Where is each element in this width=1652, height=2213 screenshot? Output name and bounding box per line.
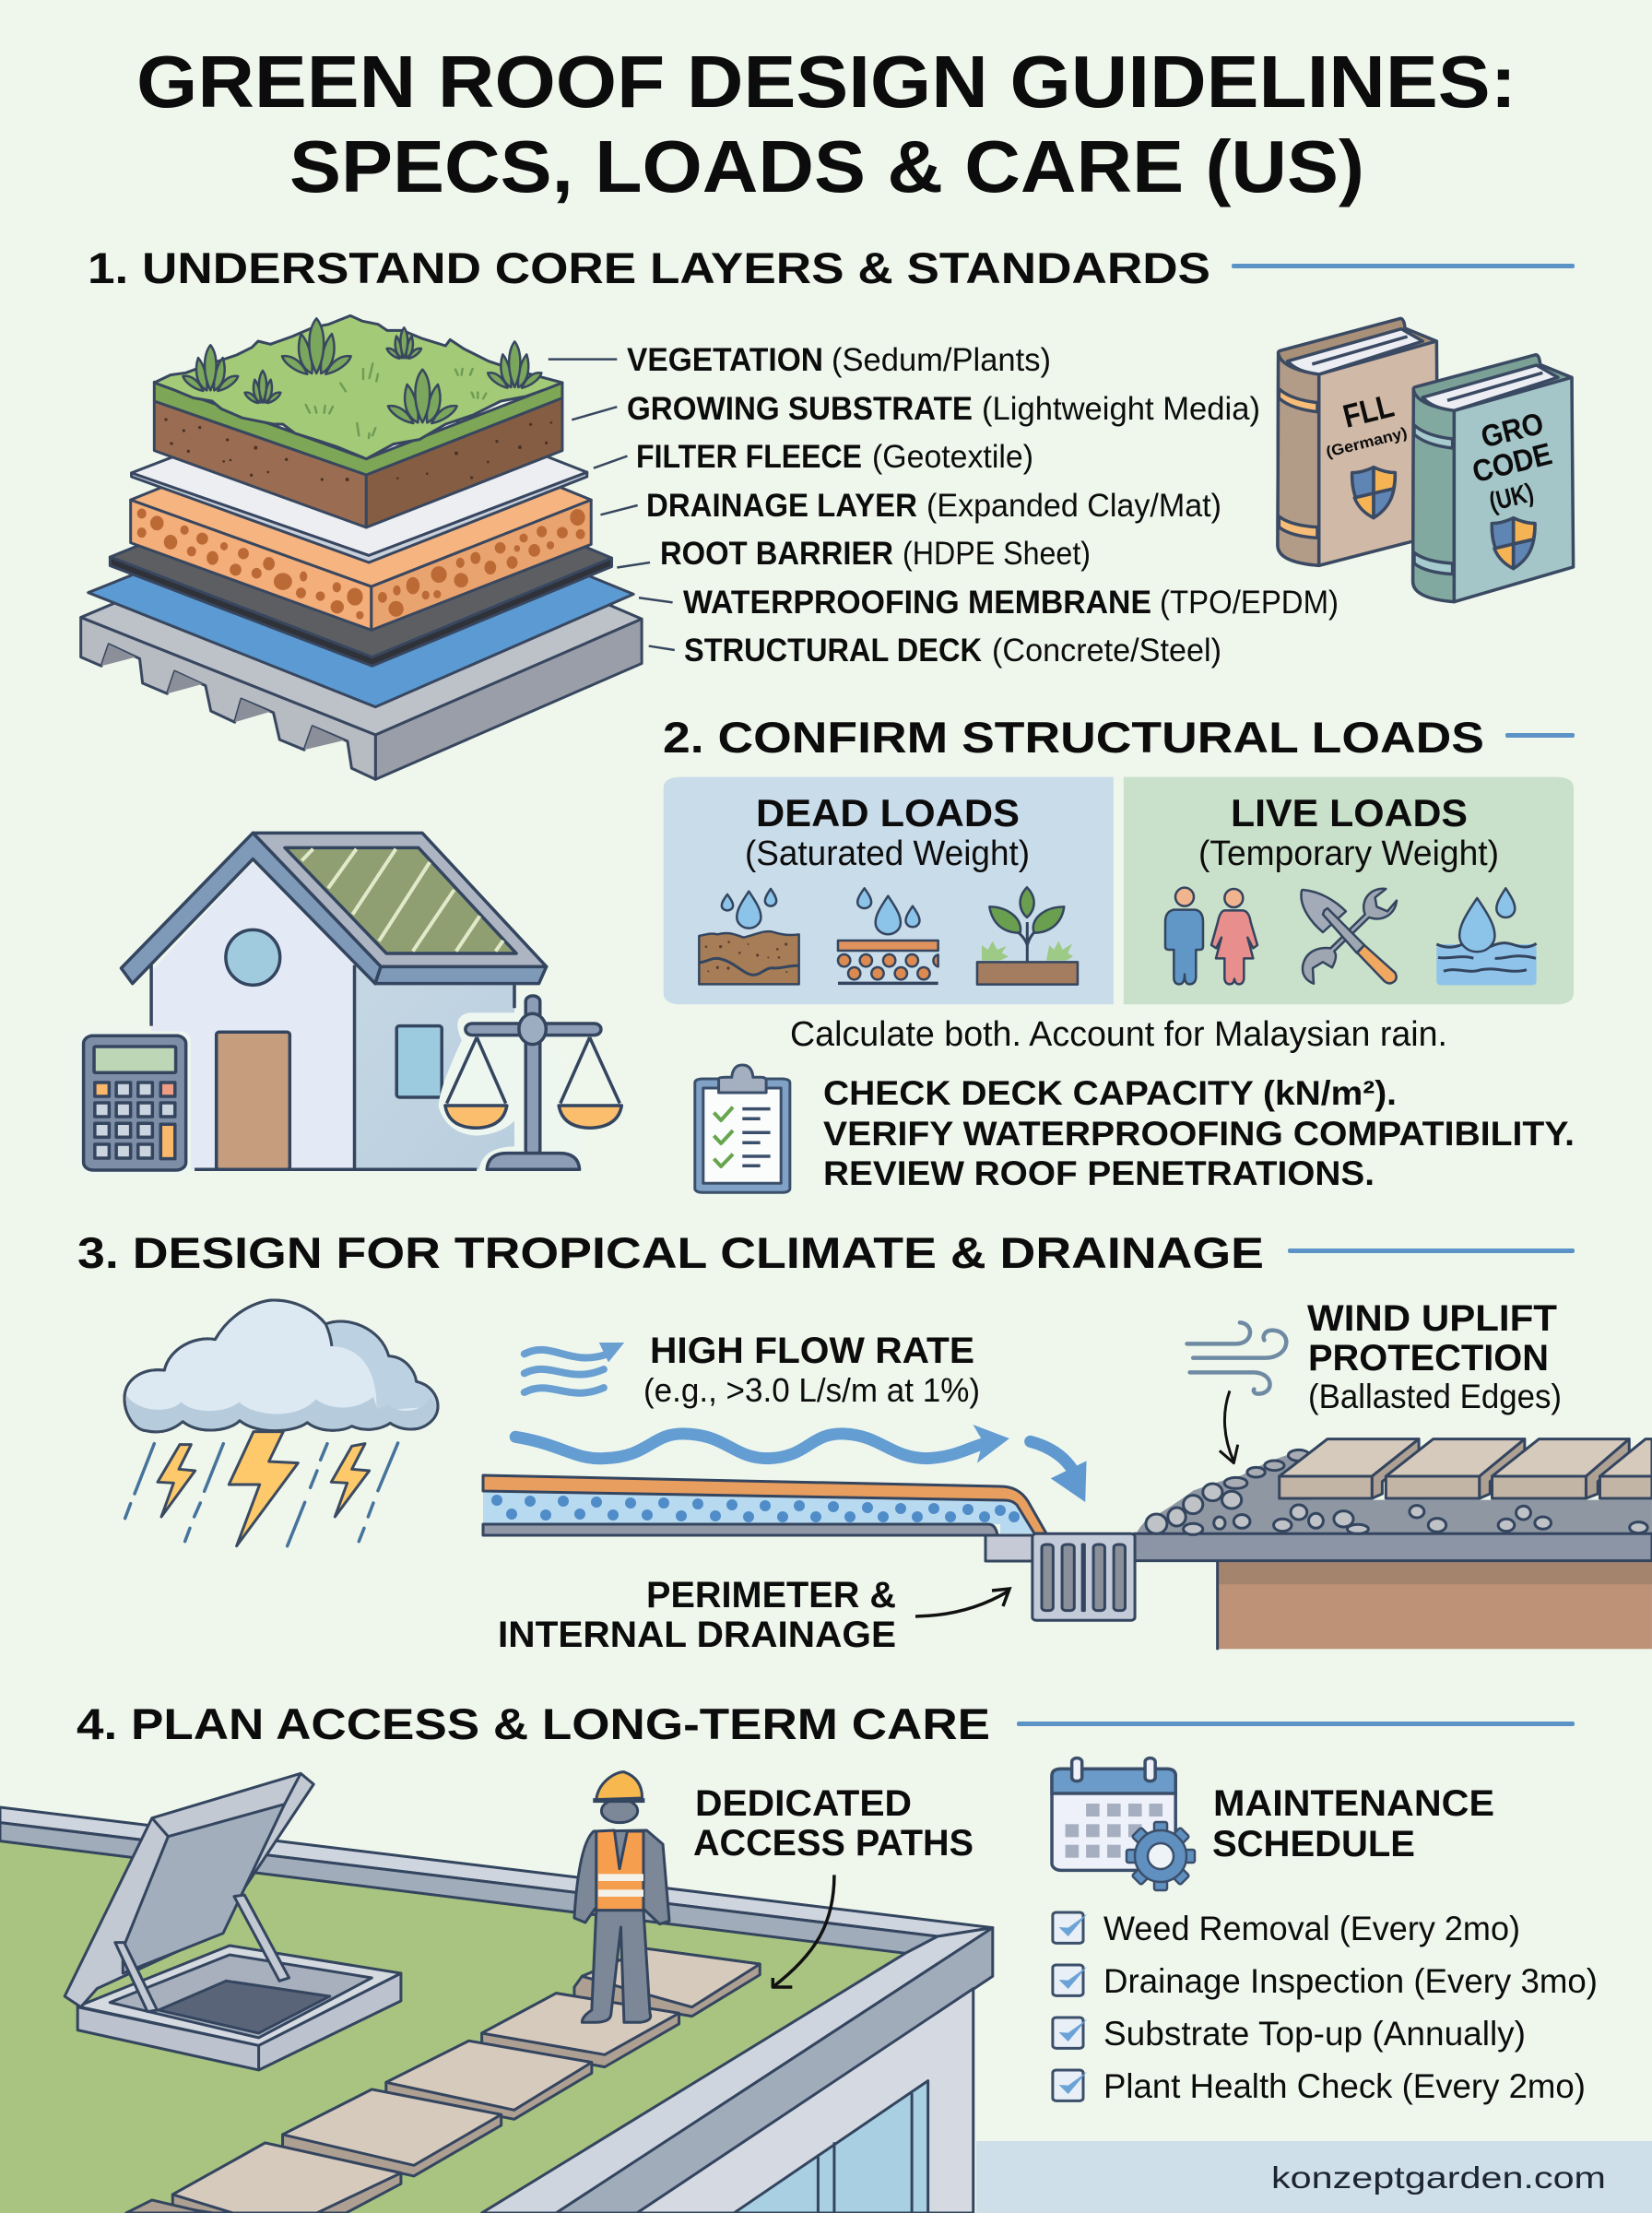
label: growing substrate: (Lightweight Media) — [982, 391, 1260, 427]
label: high flow rate: HIGH FLOW RATE — [650, 1331, 974, 1371]
layer: structural deck — [81, 498, 642, 779]
icon: plant in substrate — [977, 887, 1078, 985]
book: FLL Germany: (Germany) — [1324, 424, 1409, 461]
arrow: water into drain — [1031, 1441, 1087, 1502]
layer: drainage — [131, 407, 591, 630]
label: wind uplift protection — [1307, 1298, 1562, 1415]
building wall and window — [637, 1989, 974, 2213]
roof with green panel — [121, 833, 547, 984]
label: structural deck: (Concrete/Steel) — [992, 633, 1221, 669]
rain — [125, 1443, 398, 1546]
arrow: water flow — [515, 1425, 1009, 1463]
roof slab — [1134, 1533, 1652, 1561]
footer url: konzeptgarden.com — [1271, 2160, 1606, 2195]
gutter step — [985, 1535, 1034, 1561]
label: root barrier: (HDPE Sheet) — [903, 536, 1091, 572]
door — [217, 1032, 289, 1169]
heading: live loads: LIVE LOADS — [1231, 791, 1468, 834]
label: drainage layer: (Expanded Clay/Mat) — [926, 488, 1221, 524]
note: calculate both: Calculate both. Account for Malaysian rain. — [790, 1015, 1447, 1054]
illustration: rooftop access — [0, 1772, 993, 2213]
heading: maintenance schedule — [1212, 1783, 1494, 1864]
panel: live loads — [1124, 777, 1574, 1004]
drain substrate — [483, 1475, 1046, 1535]
label: drainage layer: DRAINAGE LAYER — [646, 488, 917, 524]
aggregate dots — [491, 1495, 1020, 1522]
cloud — [124, 1300, 438, 1432]
footer band — [976, 2141, 1652, 2213]
label: dedicated access paths: DEDICATED — [695, 1783, 912, 1824]
heading: section 1: 1. UNDERSTAND CORE LAYERS & STANDARDS — [88, 243, 1210, 292]
layer: filter fleece — [132, 384, 587, 562]
checklist text: CHECK DECK CAPACITY (kN/m²). — [823, 1074, 1397, 1112]
house walls — [151, 862, 514, 1169]
label: wind uplift protection: PROTECTION — [1308, 1338, 1549, 1379]
icon: standards books — [1278, 318, 1574, 602]
heading: maintenance schedule: MAINTENANCE — [1213, 1783, 1494, 1824]
gravel bed — [1136, 1454, 1652, 1533]
book: FLL Germany — [1278, 318, 1438, 565]
label: perimeter and internal drainage: PERIMETER & — [646, 1575, 896, 1615]
heading: section 2: 2. CONFIRM STRUCTURAL LOADS — [663, 713, 1484, 762]
label: filter fleece: FILTER FLEECE — [636, 439, 862, 475]
leader lines — [549, 360, 675, 650]
book: GRO Code UK — [1413, 355, 1574, 602]
panel: dead loads — [664, 777, 1114, 1004]
icon: gear — [1127, 1822, 1195, 1890]
label: perimeter and internal drainage: INTERNAL DRAINAGE — [498, 1615, 896, 1655]
roof hatch — [65, 1773, 401, 2070]
icon: clipboard checklist — [695, 1065, 790, 1192]
label: waterproofing membrane: (TPO/EPDM) — [1160, 585, 1339, 621]
layer labels — [627, 342, 1339, 669]
item: plant health check: Plant Health Check (Every 2mo) — [1103, 2067, 1586, 2105]
label: filter fleece: (Geotextile) — [872, 439, 1033, 475]
label: waterproofing membrane: WATERPROOFING MEMBRANE — [683, 585, 1151, 621]
icon: balance scale — [439, 996, 621, 1173]
label: dedicated access paths — [693, 1783, 974, 1864]
label: wind uplift protection: WIND UPLIFT — [1307, 1298, 1557, 1339]
title: SPECS, LOADS & CARE (US) — [289, 125, 1364, 207]
book: GRO Code UK: GRO — [1478, 407, 1547, 455]
lightning bolts — [158, 1432, 370, 1546]
floor drain grate — [1032, 1533, 1135, 1620]
icon: wind — [1187, 1322, 1286, 1394]
book: FLL Germany: FLL — [1339, 388, 1398, 435]
icon: water — [1436, 888, 1537, 985]
wall below slab — [1218, 1561, 1652, 1650]
layer: root barrier — [110, 454, 612, 666]
arrow: wind to ballast — [1220, 1391, 1238, 1463]
arrow: to drain — [915, 1589, 1009, 1616]
diagram: drainage section — [483, 1475, 1046, 1561]
parapet — [0, 1807, 993, 2213]
label: wind uplift protection: (Ballasted Edges) — [1308, 1378, 1562, 1415]
round window — [226, 929, 280, 985]
icon: calculator — [77, 1031, 191, 1176]
heading: dead loads: DEAD LOADS — [756, 791, 1020, 834]
book: GRO Code UK: CODE — [1469, 437, 1555, 490]
stepping stones — [126, 1948, 760, 2213]
subheading: saturated weight: (Saturated Weight) — [745, 834, 1030, 873]
arrow: access path — [773, 1875, 834, 1987]
diagram: edge with ballast and drain — [1031, 1322, 1652, 1650]
icon: flow waves — [525, 1343, 624, 1393]
book: GRO Code UK: (UK) — [1486, 478, 1537, 517]
subheading: temporary weight: (Temporary Weight) — [1198, 834, 1499, 873]
layer: waterproofing membrane — [88, 482, 633, 707]
checklist: maintenance tasks — [1053, 1910, 1598, 2105]
diagram: green roof layer stack — [81, 315, 675, 779]
icon: saturated drainage — [838, 888, 938, 983]
layer: growing substrate — [154, 398, 562, 527]
icon: people — [1165, 888, 1257, 984]
pavers — [1280, 1439, 1652, 1498]
label: root barrier: ROOT BARRIER — [660, 536, 893, 572]
heading: section 3: 3. DESIGN FOR TROPICAL CLIMATE & DRAINAGE — [77, 1228, 1264, 1277]
title — [136, 41, 1516, 207]
label: vegetation: (Sedum/Plants) — [832, 342, 1051, 378]
icon: saturated soil — [699, 889, 799, 984]
ballast stones — [1146, 1450, 1647, 1534]
label: structural deck: STRUCTURAL DECK — [684, 633, 982, 669]
worker — [574, 1772, 669, 2022]
item: drainage inspection: Drainage Inspection (Every 3mo) — [1103, 1962, 1598, 2000]
icon: maintenance calendar — [1052, 1758, 1195, 1890]
side window — [396, 1026, 442, 1097]
illustration: house with calculator and scales — [77, 833, 621, 1176]
item: substrate top-up: Substrate Top-up (Annually) — [1103, 2015, 1526, 2053]
icon: tools — [1301, 889, 1397, 984]
label: vegetation: VEGETATION — [627, 342, 823, 378]
checklist text: REVIEW ROOF PENETRATIONS. — [823, 1154, 1375, 1192]
green roof surface — [0, 1841, 905, 2213]
layer: vegetation — [154, 315, 562, 475]
label: perimeter and internal drainage — [498, 1575, 896, 1655]
heading: section 4: 4. PLAN ACCESS & LONG-TERM CARE — [77, 1699, 990, 1748]
label: flow rate value: (e.g., >3.0 L/s/m at 1%) — [643, 1371, 980, 1409]
item: weed removal: Weed Removal (Every 2mo) — [1103, 1910, 1520, 1947]
title: GREEN ROOF DESIGN GUIDELINES: — [136, 41, 1516, 123]
label: dedicated access paths: ACCESS PATHS — [693, 1823, 974, 1864]
checklist text: VERIFY WATERPROOFING COMPATIBILITY. — [823, 1115, 1575, 1153]
heading: maintenance schedule: SCHEDULE — [1212, 1824, 1415, 1864]
label: growing substrate: GROWING SUBSTRATE — [627, 391, 973, 427]
icon: storm cloud with lightning — [124, 1300, 438, 1546]
checklist text — [823, 1074, 1575, 1192]
